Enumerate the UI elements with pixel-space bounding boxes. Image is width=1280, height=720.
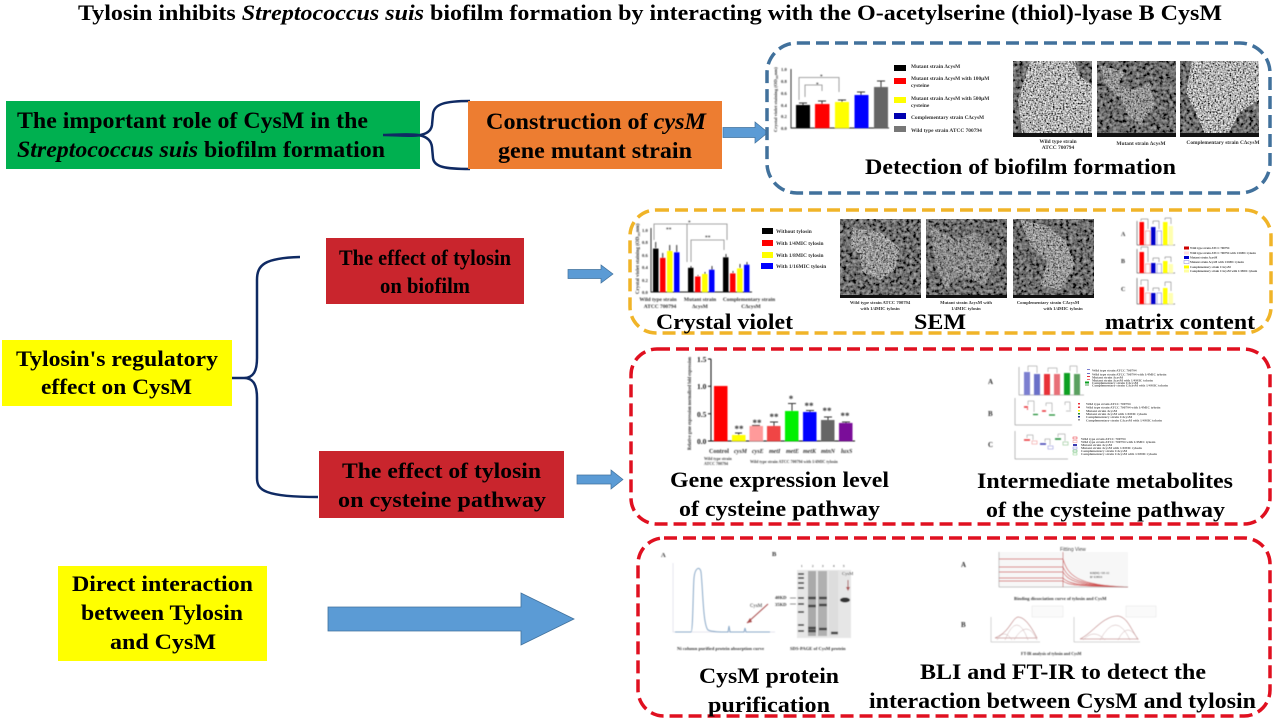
bar chart: crystal violet with tylosin: [636, 220, 775, 310]
heading: gene expression: of cysteine pathway: [679, 496, 880, 521]
bar chart: crystal violet mutant: Crystal violet staining (OD₅₉₅nm): [773, 67, 778, 132]
bar chart: gene expression: 1.0: [697, 382, 707, 391]
micrograph: mutant: [1097, 61, 1176, 137]
bar chart: crystal violet with tylosin: **: [705, 235, 711, 241]
panel: cysteine pathway: [631, 349, 1270, 524]
panel: detection of biofilm formation: [767, 43, 1270, 193]
bar chart: crystal violet with tylosin: Complementary strain: [723, 297, 775, 303]
chart: SDS-PAGE gel: CysM: [842, 571, 853, 576]
bar chart: gene expression: Relative gene expression normalized fold expression: [688, 357, 693, 450]
box: construction of cysM mutant: Construction of cysM: [486, 109, 707, 135]
brace: role to construction: [383, 101, 470, 169]
legend: metabolite A: Complementary strain CΔcysM with 1/4MIC tylosin: [1092, 384, 1168, 388]
micrograph: mutant with tylosin: [926, 219, 1007, 298]
heading: crystal violet: Crystal violet: [656, 309, 794, 334]
legend: metabolite B: Wild type strain ATCC 700794: [1086, 402, 1131, 406]
bar chart: gene expression: **: [734, 424, 744, 434]
bar chart: gene expression: 0.0: [697, 437, 707, 446]
bar chart: gene expression: **: [770, 412, 779, 422]
legend: metabolite B: Complementary strain CΔcysM with 1/4MIC tylosin: [1086, 418, 1162, 422]
captions: micrographs: ATCC 700794: [1042, 145, 1074, 151]
captions: tylosin micrographs: Mutant strain ΔcysM with: [940, 300, 992, 305]
heading: BLI and FT-IR: [869, 659, 1256, 713]
legend: metabolite A: Mutant strain ΔcysM with 1/4MIC tylosin: [1092, 378, 1153, 382]
box: tylosin regulatory effect: [2, 340, 232, 406]
box: effect on biofilm: on biofilm: [380, 273, 470, 298]
heading: CysM protein purification: CysM protein: [699, 663, 839, 688]
small charts: intermediate metabolites: C: [988, 441, 993, 449]
chart: SDS-PAGE gel: SDS-PAGE of CysM protein: [790, 646, 846, 651]
chart: absorption curve: Ni column purified protein absorption curve: [677, 646, 764, 651]
captions: tylosin micrographs: Wild type strain ATCC 700794: [850, 300, 911, 305]
heading: intermediate metabolites: Intermediate metabolites: [977, 468, 1233, 493]
box: effect on cysteine pathway: [319, 451, 564, 518]
bar chart: crystal violet mutant: 0.0: [781, 126, 787, 131]
captions: micrographs: Mutant strain ΔcysM: [1116, 141, 1166, 147]
legend: metabolite A: Wild type strain ATCC 700794: [1092, 368, 1137, 372]
box: tylosin regulatory effect: Tylosin's regulatory: [16, 346, 218, 371]
captions: tylosin micrographs: with 1/4MIC tylosin: [860, 306, 900, 311]
legend: metabolite A: [1085, 368, 1168, 388]
captions: tylosin micrographs: 1/4MIC tylosin: [951, 306, 981, 311]
box: direct interaction: between Tylosin: [81, 600, 243, 625]
bar chart: crystal violet with tylosin: ATCC 700794: [644, 304, 676, 310]
heading: intermediate metabolites: [977, 468, 1233, 522]
chart: SDS-PAGE gel: 40KD: [775, 595, 787, 600]
legend: metabolite A: Wild type strain ATCC 700794 with 1/4MIC tylosin: [1092, 372, 1166, 376]
bar chart: gene expression: cysE: [752, 449, 764, 455]
captions: tylosin micrographs: Complementary strain CΔcysM: [1017, 300, 1080, 305]
arrow: construction to detection: [723, 122, 768, 143]
heading: matrix content: matrix content: [1105, 309, 1256, 334]
heading: BLI and FT-IR: interaction between CysM and tylosin: [869, 688, 1256, 713]
legend: tylosin dose: [761, 228, 826, 270]
chart: SDS-PAGE gel: 2: [812, 564, 814, 568]
legend: metabolite A: Complementary strain CΔcysM: [1092, 381, 1139, 385]
box: important role of CysM: [6, 101, 420, 169]
bar chart: gene expression: metE: [786, 449, 799, 455]
box: tylosin regulatory effect: effect on CysM: [41, 374, 192, 399]
arrow: cysteine effect to panel: [577, 470, 623, 489]
bar chart: gene expression: [688, 355, 855, 466]
legend: metabolite C: Mutant strain ΔcysM: [1081, 443, 1113, 447]
bar chart: gene expression: cysM: [734, 449, 748, 455]
legend: mutant strains: Mutant strain ΔcysM: [911, 64, 960, 70]
legend: tylosin dose: With 1/16MIC tylosin: [776, 264, 826, 270]
legend: metabolite C: Complementary strain CΔcysM: [1081, 449, 1128, 453]
legend: matrix content: [1184, 246, 1257, 273]
chart: SDS-PAGE gel: B: [772, 551, 777, 558]
bar chart: crystal violet mutant: 1.0: [781, 67, 787, 72]
arrow: direct interaction to panel: [328, 593, 574, 645]
heading: intermediate metabolites: of the cysteine pathway: [986, 497, 1225, 522]
box: effect on cysteine pathway: The effect of tylosin: [342, 458, 541, 483]
legend: metabolite B: [1078, 402, 1162, 422]
title: Tylosin inhibits Streptococcus suis biofilm formation by interacting with the O-acetylserine (thiol)-lyase B CysM: [78, 0, 1222, 25]
captions: micrographs: Complementary strain CΔcysM: [1186, 140, 1260, 146]
micrograph: complementary: [1180, 61, 1259, 137]
captions: tylosin micrographs: with 1/4MIC tylosin: [1043, 306, 1083, 311]
chart: BLI fitting view: R² 0.9914: [1090, 575, 1103, 579]
box: direct interaction: and CysM: [110, 629, 216, 654]
box: important role of CysM: Streptococcus suis biofilm formation: [17, 137, 385, 163]
legend: tylosin dose: With 1/4MIC tylosin: [776, 241, 824, 247]
bar chart: crystal violet with tylosin: *: [688, 220, 691, 226]
panel: tylosin effect on biofilm: [630, 210, 1271, 334]
captions: micrographs: [1039, 139, 1260, 151]
box: effect on biofilm: The effect of tylosin: [339, 245, 511, 270]
legend: mutant strains: Complementary strain CΔcysM: [911, 115, 984, 121]
legend: matrix content: Mutant strain ΔcysM with 1/4MIC tylosin: [1190, 260, 1244, 264]
chart: SDS-PAGE gel: 3: [822, 564, 824, 568]
box: effect on cysteine pathway: on cysteine pathway: [338, 487, 546, 512]
legend: tylosin dose: Without tylosin: [776, 229, 812, 235]
legend: metabolite C: Wild type strain ATCC 700794: [1081, 437, 1126, 441]
legend: mutant strains: Mutant strain ΔcysM with 100μM: [911, 76, 989, 82]
bar chart: crystal violet mutant: 0.2: [781, 114, 787, 119]
box: direct interaction: Direct interaction: [72, 571, 253, 596]
bar chart: gene expression: **: [822, 406, 832, 416]
legend: metabolite B: Mutant strain ΔcysM: [1086, 409, 1118, 413]
legend: mutant strains: [894, 64, 989, 134]
legend: mutant strains: Wild type strain ATCC 700794: [911, 128, 982, 134]
heading: CysM protein purification: [699, 663, 839, 717]
legend: matrix content: Complementary strain CΔcysM: [1190, 265, 1231, 269]
heading: gene expression: [670, 467, 889, 521]
legend: metabolite B: Mutant strain ΔcysM with 1/4MIC tylosin: [1086, 412, 1147, 416]
bar chart: crystal violet with tylosin: ΔcysM: [692, 304, 708, 310]
bar chart: gene expression: Wild type strain ATCC 700794 with 1/4MIC tylosin: [750, 459, 839, 464]
arrow: biofilm effect to panel: [568, 265, 613, 283]
legend: metabolite B: Wild type strain ATCC 700794 with 1/4MIC tylosin: [1086, 406, 1160, 410]
bar chart: crystal violet with tylosin: Mutant strain: [684, 297, 716, 303]
chart: SDS-PAGE gel: 4: [833, 564, 835, 568]
bar chart: crystal violet mutant: 0.4: [781, 103, 787, 108]
captions: micrographs: Wild type strain: [1039, 139, 1077, 145]
bar chart: gene expression: luxS: [841, 449, 853, 455]
chart: FT-IR curves: FT-IR analysis of tylosin and CysM: [1021, 651, 1082, 656]
legend: matrix content: Complementary strain CΔcysM with 1/4MIC tylosin: [1190, 269, 1257, 273]
panel: protein interaction: [638, 538, 1270, 717]
bar chart: gene expression: **: [804, 401, 814, 411]
bar chart: crystal violet with tylosin: 0.4: [642, 265, 648, 270]
bar chart: gene expression: **: [752, 418, 762, 428]
legend: metabolite B: Complementary strain CΔcysM: [1086, 415, 1133, 419]
box: effect on biofilm: [326, 238, 524, 304]
small charts: intermediate metabolites: [988, 366, 1084, 459]
legend: metabolite C: Wild type strain ATCC 700794 with 1/4MIC tylosin: [1081, 440, 1155, 444]
heading: SEM: SEM: [914, 309, 966, 334]
legend: matrix content: Mutant strain ΔcysM: [1190, 256, 1218, 260]
legend: mutant strains: cysteine: [911, 83, 930, 89]
small charts: matrix content: A: [1121, 232, 1126, 238]
heading: BLI and FT-IR: BLI and FT-IR to detect the: [920, 659, 1206, 684]
chart: BLI fitting view: Binding dissociation curve of tylosin and CysM: [1014, 596, 1107, 601]
heading: gene expression: Gene expression level: [670, 467, 889, 492]
legend: tylosin dose: With 1/8MIC tylosin: [776, 253, 824, 259]
bar chart: gene expression: 0.5: [697, 410, 707, 419]
bar chart: crystal violet with tylosin: **: [666, 227, 672, 233]
bar chart: crystal violet with tylosin: 0.0: [642, 290, 648, 295]
bar chart: gene expression: **: [840, 411, 850, 421]
bar chart: crystal violet with tylosin: 0.2: [642, 278, 648, 283]
micrograph: wild type: [1013, 61, 1092, 137]
micrograph: complementary with tylosin: [1013, 219, 1094, 298]
chart: SDS-PAGE gel: 35KD: [775, 602, 787, 607]
bar chart: gene expression: metI: [769, 449, 781, 455]
chart: absorption curve: [661, 552, 775, 651]
box: construction of cysM mutant: gene mutant strain: [498, 138, 692, 164]
bar chart: crystal violet mutant: [773, 67, 889, 132]
bar chart: gene expression: 1.5: [697, 355, 707, 364]
bar chart: crystal violet with tylosin: CΔcysM: [741, 304, 761, 310]
bar chart: gene expression: metK: [803, 449, 817, 455]
bar chart: gene expression: Control: [709, 449, 729, 455]
chart: FT-IR curves: [961, 606, 1156, 656]
chart: SDS-PAGE gel: 1: [801, 564, 803, 568]
bar chart: crystal violet with tylosin: 1.0: [642, 228, 648, 233]
chart: BLI fitting view: [961, 547, 1128, 601]
bar chart: crystal violet with tylosin: 0.8: [642, 240, 648, 245]
legend: metabolite C: [1073, 437, 1157, 456]
bar chart: crystal violet mutant: *: [820, 74, 823, 80]
bar chart: gene expression: ATCC 700794: [704, 461, 728, 466]
bar chart: gene expression: mtnN: [821, 449, 836, 455]
chart: FT-IR curves: B: [961, 621, 966, 629]
legend: matrix content: Wild type strain ATCC 700794 with 1/4MIC tylosin: [1190, 251, 1256, 255]
chart: BLI fitting view: Fitting View: [1060, 547, 1086, 553]
micrograph: wild type with tylosin: [840, 219, 921, 298]
legend: metabolite C: Complementary strain CΔcysM with 1/4MIC tylosin: [1081, 452, 1157, 456]
heading: CysM protein purification: purification: [708, 692, 830, 717]
bar chart: crystal violet mutant: 0.8: [781, 79, 787, 84]
bar chart: crystal violet mutant: 0.6: [781, 91, 787, 96]
bar chart: crystal violet mutant: *: [816, 82, 819, 88]
chart: BLI fitting view: A: [961, 561, 966, 569]
legend: mutant strains: cysteine: [911, 103, 930, 109]
small charts: matrix content: B: [1121, 259, 1125, 265]
bar chart: crystal violet with tylosin: Wild type strain: [639, 297, 677, 303]
bar chart: gene expression: *: [789, 394, 794, 404]
box: construction of cysM mutant: [468, 101, 722, 169]
bar chart: crystal violet with tylosin: Crystal violet staining (OD₅₉₅nm): [636, 223, 641, 294]
legend: metabolite C: Mutant strain ΔcysM with 1/4MIC tylosin: [1081, 446, 1142, 450]
box: important role of CysM: The important role of CysM in the: [17, 108, 368, 134]
bar chart: crystal violet with tylosin: 0.6: [642, 253, 648, 258]
heading: detection: Detection of biofilm formation: [865, 154, 1176, 179]
chart: absorption curve: CysM: [750, 604, 763, 609]
small charts: matrix content: [1121, 218, 1175, 304]
legend: mutant strains: Mutant strain ΔcysM with 500μM: [911, 96, 989, 102]
small charts: matrix content: C: [1121, 287, 1125, 293]
legend: matrix content: Wild type strain ATCC 700794: [1190, 246, 1230, 250]
chart: SDS-PAGE gel: [772, 551, 853, 651]
legend: metabolite A: Mutant strain ΔcysM: [1092, 376, 1124, 380]
small charts: intermediate metabolites: B: [988, 410, 993, 418]
chart: BLI fitting view: KD(M) <1E-12: [1090, 571, 1110, 575]
chart: SDS-PAGE gel: 5: [843, 564, 845, 568]
captions: tylosin micrographs: [850, 300, 1083, 311]
small charts: intermediate metabolites: A: [988, 378, 993, 386]
brace: tylosin regulatory effect: [232, 257, 318, 497]
box: direct interaction: [58, 566, 267, 661]
bar chart: gene expression: Wild type strain: [704, 456, 732, 461]
chart: absorption curve: A: [661, 552, 666, 559]
